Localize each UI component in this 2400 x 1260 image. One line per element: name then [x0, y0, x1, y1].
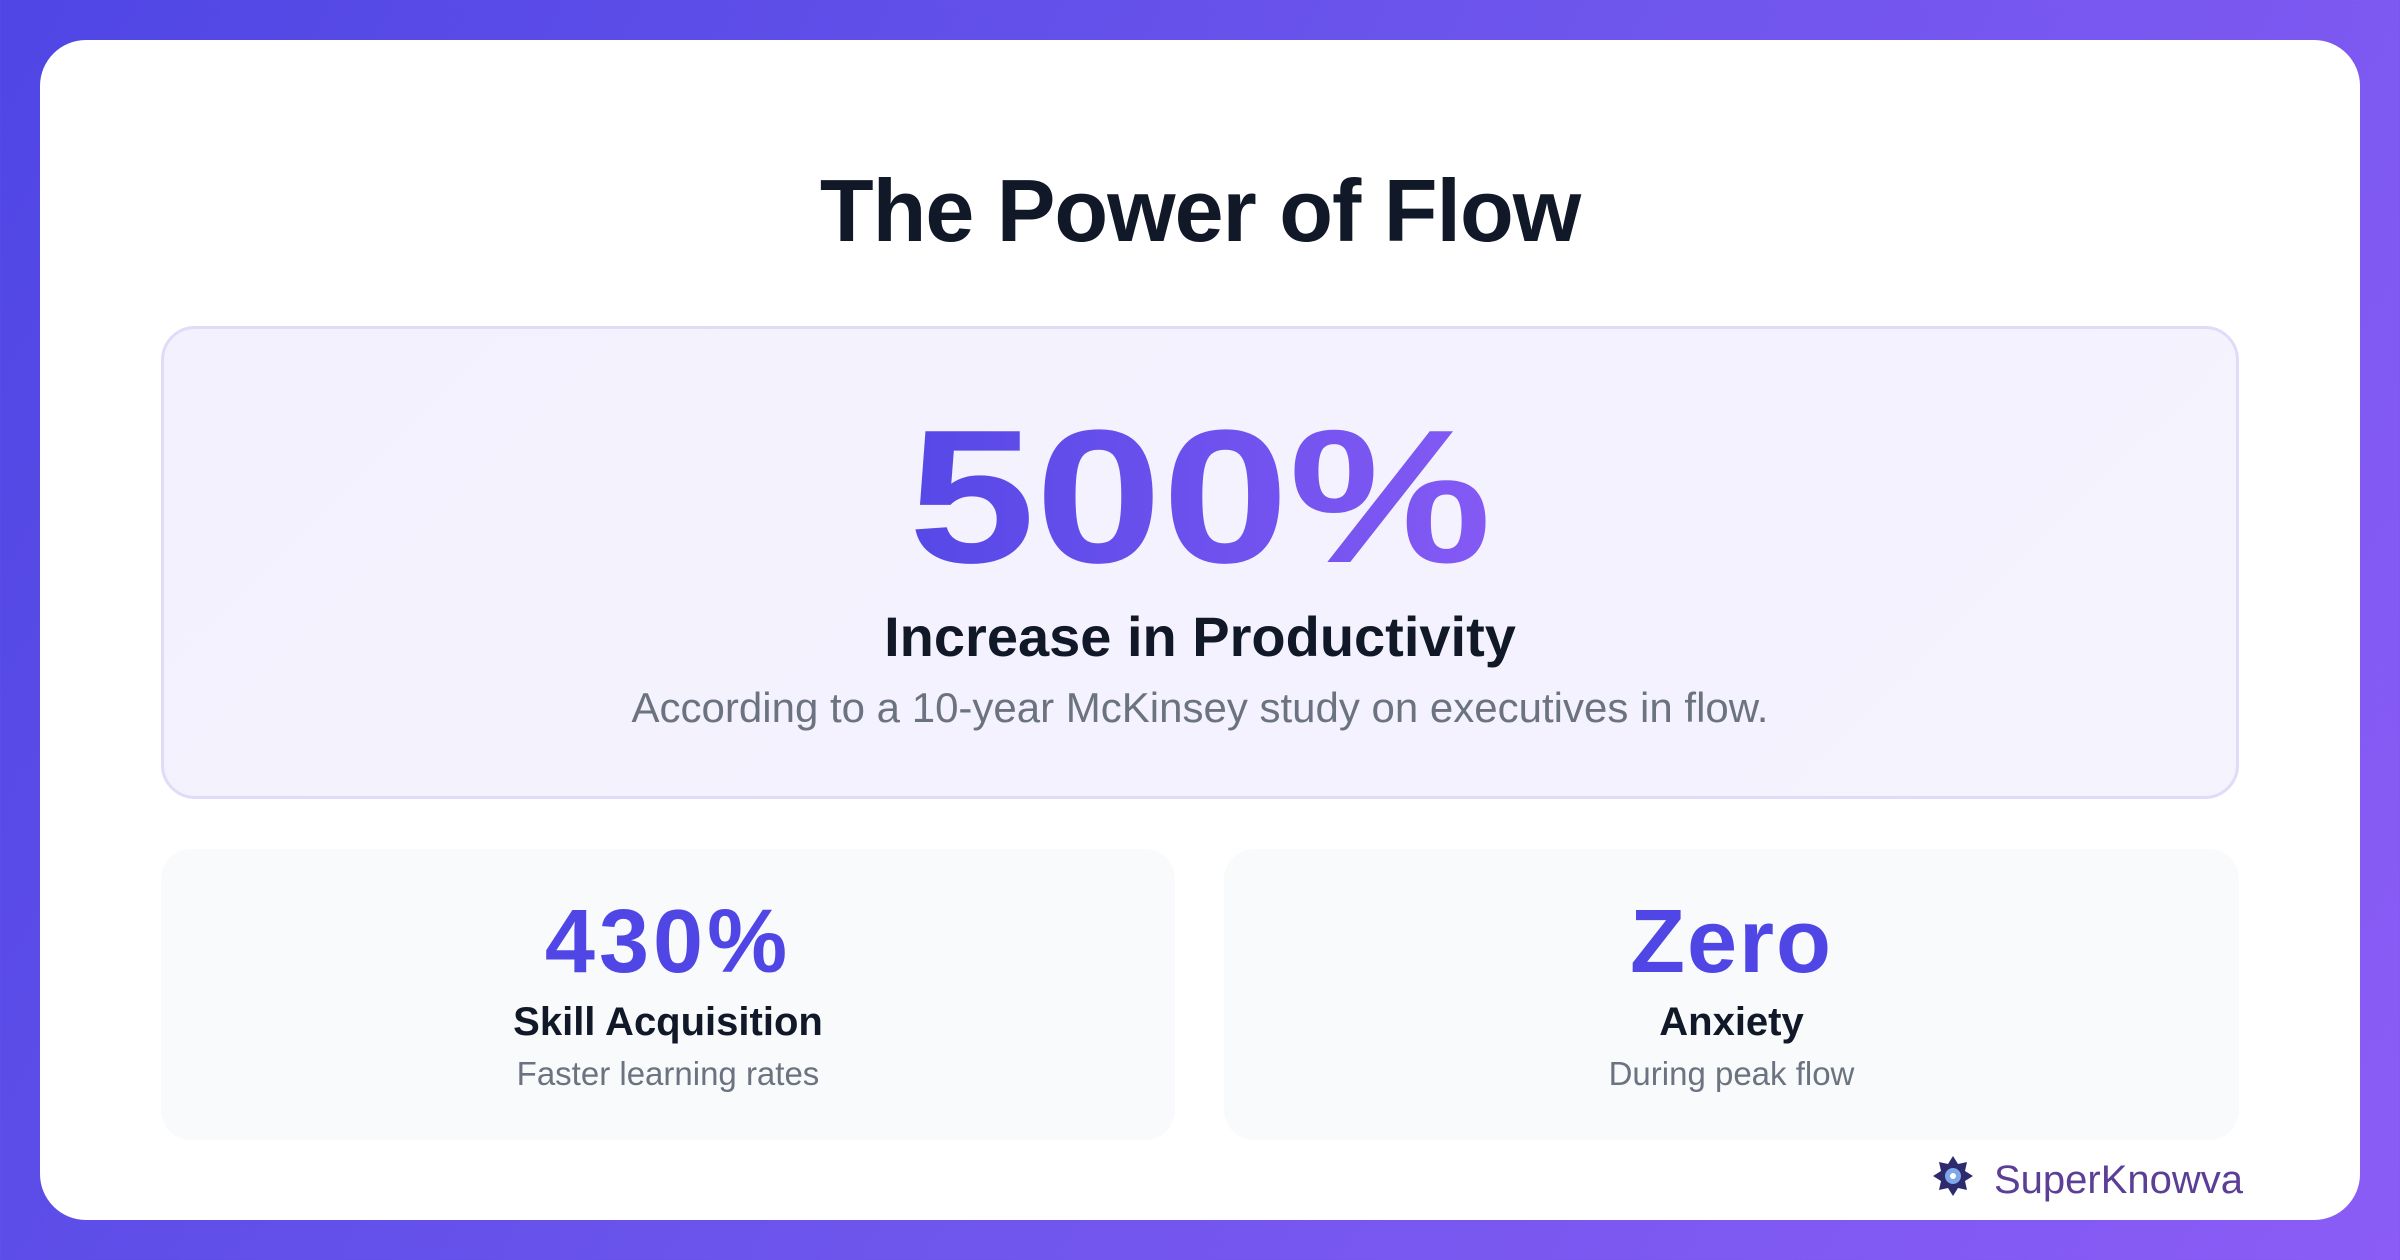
label: Anxiety — [1659, 1000, 1804, 1044]
brand name: SuperKnowva — [1994, 1158, 2243, 1202]
panel: anxiety — [1224, 849, 2239, 1140]
sublabel: During peak flow — [1609, 1055, 1854, 1092]
icon: star — [1933, 1156, 1973, 1196]
logo — [1933, 1156, 2243, 1202]
panel: main stat — [161, 326, 2239, 799]
label: Skill Acquisition — [513, 1000, 823, 1044]
stat zero: Zero — [1630, 892, 1833, 992]
heading: increase in productivity: Increase in Productivity — [884, 605, 1516, 668]
sublabel: Faster learning rates — [517, 1055, 819, 1092]
big number 500%: 500% — [908, 391, 1492, 603]
title: The Power of Flow — [820, 161, 1580, 260]
big number 500% — [0, 402, 2400, 592]
description: According to a 10-year McKinsey study on executives in flow. — [632, 684, 1768, 731]
stat 430%: 430% — [545, 892, 791, 992]
panel: skill acquisition — [161, 849, 1175, 1140]
